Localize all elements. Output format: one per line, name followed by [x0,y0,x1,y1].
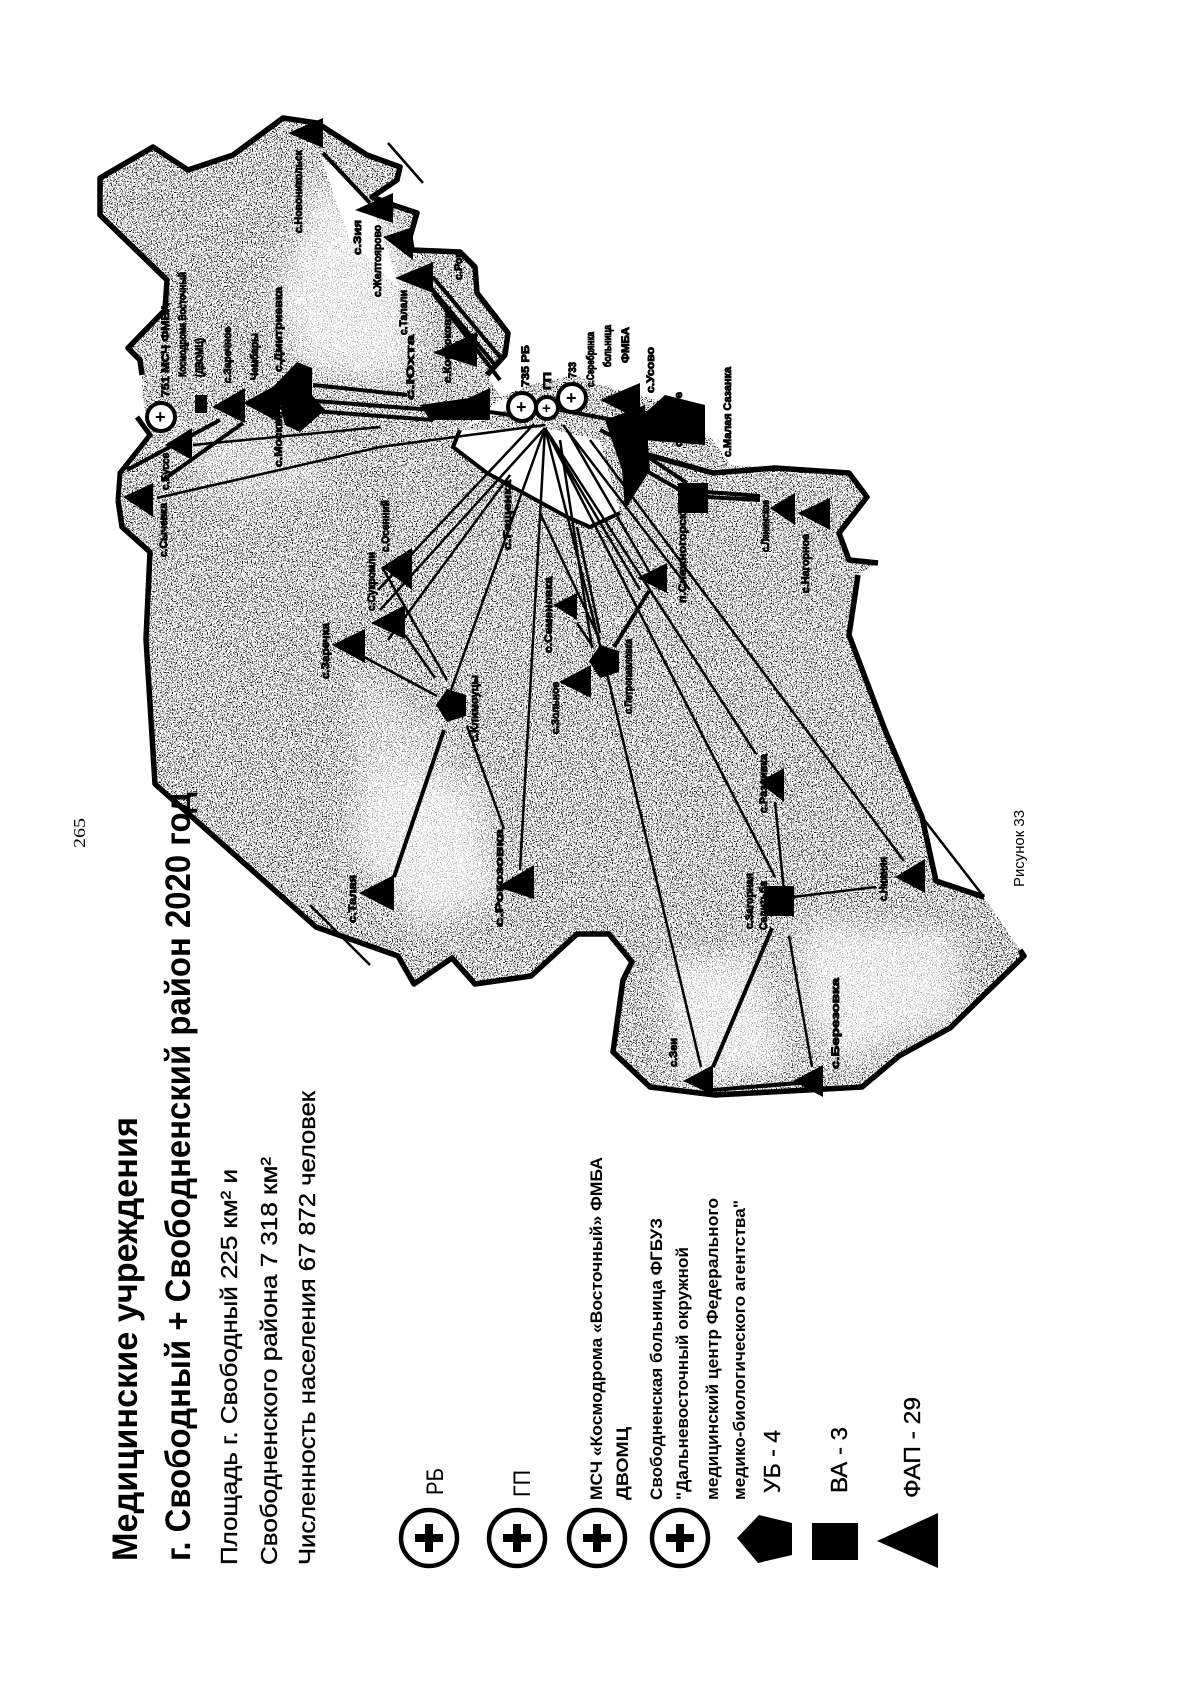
settlement labels on the map: с.Юхта [405,333,417,400]
settlement labels on the map: 733 [567,362,579,378]
settlement labels on the map: с.Буссе [160,453,172,490]
FAP triangles on the map [123,118,925,1097]
hospital cross markers on the map: + [155,407,166,427]
legend: UB pentagon [737,1430,792,1563]
settlement labels on the map: с.Талали [398,290,410,335]
legend: VA square: ВА - 3 [826,1427,852,1493]
legend: Svobodnenskaya hospital: медицинский центр Федерального [703,1198,722,1500]
settlement labels on the map: с.Зеи [668,1038,680,1067]
settlement labels on the map: с.Петропавловка [623,638,635,714]
area and population text [216,1090,320,1565]
page number: 265 [70,818,89,848]
settlement labels on the map: с.Климоуцы [469,675,481,742]
area and population text: Свободненского района 7 318 км² [256,1157,282,1565]
title: Медицинские учреждения [106,1117,145,1561]
settlement labels on the map: ФМБА [620,327,632,363]
settlement labels on the map: с.Костюковка [442,306,454,383]
settlement labels on the map: с.Разливка [758,753,770,813]
legend: Svobodnenskaya hospital: "Дальневосточный окружной [673,1247,692,1500]
map stipple fill [90,100,1050,1100]
settlement labels on the map: больница [602,324,614,367]
settlement labels on the map: с.Нагорное [800,534,812,593]
settlement labels on the map: с.Ленинское [760,500,772,552]
area and population text: Численность населения 67 872 человек [294,1090,320,1565]
settlement labels on the map [158,150,890,1069]
settlement labels on the map: (ДВОМЦ) [194,338,206,377]
settlement labels on the map: с.Зольное [550,682,562,734]
settlement labels on the map: с.Талая [347,875,359,923]
settlement labels on the map: с.Зия [352,220,364,255]
legend: RB [401,1468,457,1566]
settlement labels on the map: с.Желтоярово [372,225,384,297]
legend: UB pentagon: УБ - 4 [759,1430,785,1493]
title: г. Свободный + Свободненский район 2020 год [159,792,198,1561]
settlement labels on the map: с.Москвитино [273,383,285,467]
settlement labels on the map: с.Рог [453,253,465,280]
legend: FAP triangle [877,1397,938,1568]
settlement labels on the map: с.Сукромли [366,552,378,611]
figure caption: Рисунок 33 [1011,810,1028,887]
settlement labels on the map: с.Серебрянка [585,331,597,387]
legend: MSCh: МСЧ «Космодрома «Восточный» ФМБА [587,1157,606,1500]
urban/district hospital pentagons on the map [436,645,619,722]
settlement labels on the map: с.Заречное [222,327,234,383]
settlement labels on the map: с.Заречка [320,622,332,679]
settlement labels on the map: с.Курское [673,392,685,447]
legend: Svobodnenskaya hospital [647,1198,749,1566]
hospital cross markers on the map [147,384,586,431]
settlement labels on the map: с.Нижняя [878,857,890,901]
settlement labels on the map: с.Новоникольск [293,150,305,233]
legend: MSCh: ДВОМЦ [613,1426,632,1500]
legend: RB: РБ [422,1468,449,1495]
legend: MSCh [569,1157,632,1566]
dark cluster of overlapped symbols [275,362,705,510]
ambulatory squares on the map [195,395,794,916]
area and population text: Площадь г. Свободный 225 км² и [216,1169,242,1565]
settlement labels on the map: п.Снежногорск [677,512,689,603]
settlement labels on the map: 751 МСЧ ФМБА [160,303,172,397]
legend: GP: ГП [509,1470,536,1497]
legend: Svobodnenskaya hospital: Свободненская больница ФГБУЗ [647,1218,666,1500]
settlement labels on the map: с.Усово [645,347,657,393]
settlement labels on the map: Космодрома Восточный [177,272,189,377]
settlement labels on the map: Чембары [249,333,261,380]
legend: FAP triangle: ФАП - 29 [899,1397,925,1498]
settlement labels on the map: с.Дмитриевка [273,286,285,372]
settlement labels on the map: с.Рогозовка [494,828,506,927]
settlement labels on the map: Селитьба [758,880,770,930]
settlement labels on the map: с.Загорная [744,873,756,929]
settlement labels on the map: с.Малая Сазанка [722,366,734,457]
settlement labels on the map: с.Осенний [380,500,392,552]
title [106,792,198,1561]
legend: Svobodnenskaya hospital: медико-биологического агентства" [730,1200,749,1500]
settlement labels on the map: 735 РБ [520,345,532,387]
legend: VA square [812,1427,858,1560]
legend: GP [489,1470,545,1566]
hospital cross markers on the map: + [566,388,577,408]
settlement labels on the map: с.Сычевка [158,502,170,557]
district outer border [100,118,1024,1095]
settlement labels on the map: с.Семеновка [543,576,555,653]
map of Svobodny district [90,100,1050,1100]
city border of Svobodny [453,430,620,527]
settlement labels on the map: ГП [542,372,554,390]
connection lines from hospitals to feldsher posts [127,153,904,1090]
hospital cross markers on the map: + [516,397,527,417]
settlement labels on the map: с.Березовка [830,977,842,1069]
settlement labels on the map: с.Гащенка [502,479,514,550]
hospital cross markers on the map: + [542,400,551,417]
legend [401,1157,938,1568]
